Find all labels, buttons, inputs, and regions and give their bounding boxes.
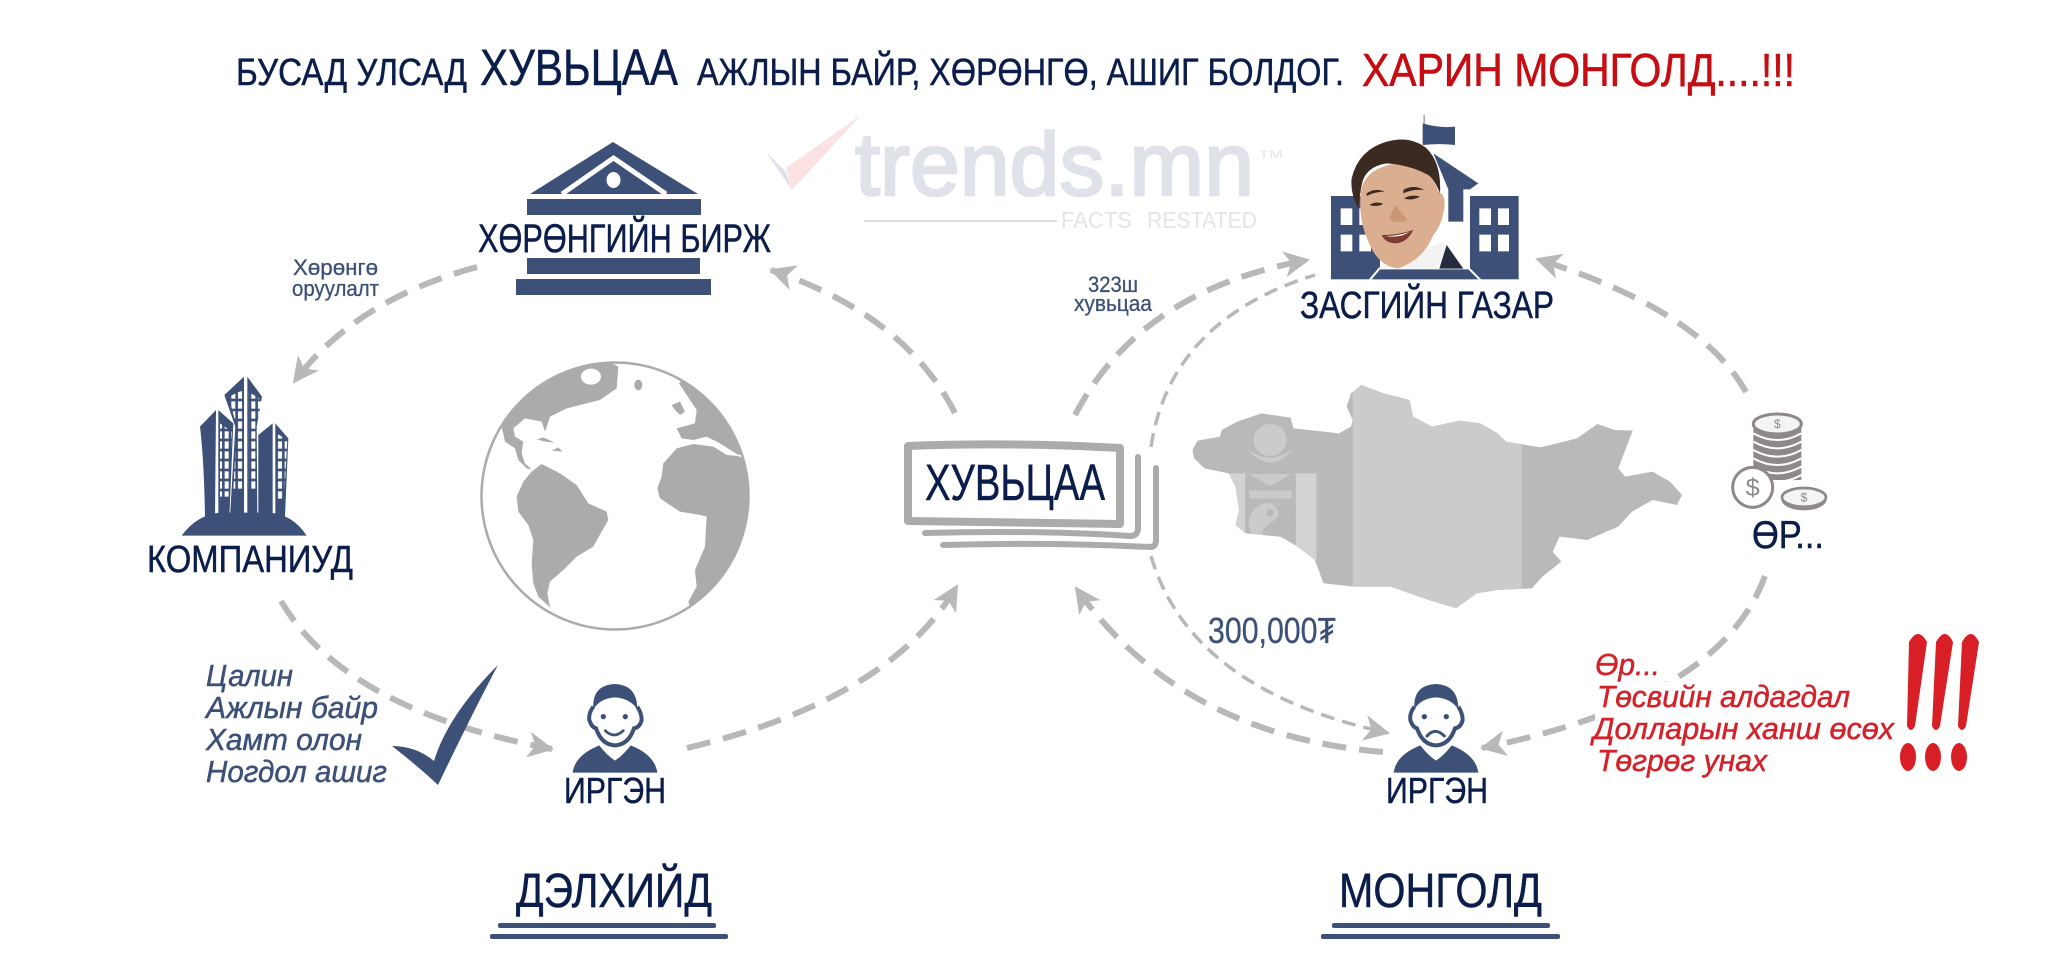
label: investment: оруулалт bbox=[292, 276, 379, 301]
label: 323 shares bbox=[1074, 272, 1153, 316]
text block: benefits list: Хамт олон bbox=[205, 722, 362, 757]
label: 323 shares: хувьцаа bbox=[1074, 291, 1153, 316]
title: ХАРИН МОНГОЛД....!!! bbox=[1362, 44, 1795, 96]
arrow: thin dashed top, shares to government bbox=[1151, 275, 1315, 447]
text block: consequences: Төгрөг унах bbox=[1597, 743, 1768, 778]
label: stock exchange: ХӨРӨНГИЙН БИРЖ bbox=[478, 215, 771, 261]
watermark: trends.mn: trends.mn bbox=[855, 114, 1254, 214]
heading: world: ДЭЛХИЙД bbox=[516, 863, 712, 918]
arrow: debt to government bbox=[1537, 259, 1746, 392]
label: 323 shares: 323ш bbox=[1088, 272, 1138, 297]
text block: consequences: Өр... bbox=[1595, 647, 1660, 682]
icon: coins: $ bbox=[1746, 474, 1760, 502]
icon: stock exchange building bbox=[516, 142, 711, 295]
label: citizen: ИРГЭН bbox=[564, 770, 666, 811]
label: investment: Хөрөнгө bbox=[293, 255, 378, 280]
title: БУСАД УЛСАД bbox=[236, 52, 467, 94]
heading: world bbox=[490, 863, 728, 939]
arrow: exchange to companies bbox=[294, 267, 477, 382]
icon: coins: $ bbox=[1801, 490, 1808, 504]
text block: consequences: Долларын ханш өсөх bbox=[1590, 711, 1895, 746]
label: citizen (Mongolia): ИРГЭН bbox=[1386, 770, 1488, 811]
label: government: ЗАСГИЙН ГАЗАР bbox=[1300, 282, 1554, 327]
heading: Mongolia: МОНГОЛД bbox=[1339, 865, 1542, 918]
title bbox=[236, 39, 1795, 96]
text block: consequences: Төсвийн алдагдал bbox=[1597, 679, 1850, 714]
portrait bbox=[1351, 139, 1445, 268]
icon: coins bbox=[1733, 414, 1827, 510]
icon: globe bbox=[482, 353, 760, 630]
label: companies: КОМПАНИУД bbox=[147, 539, 353, 581]
text block: benefits list bbox=[204, 658, 387, 789]
watermark: trends.mn: RESTATED bbox=[1147, 207, 1257, 233]
icon: sad citizen bbox=[1394, 684, 1478, 773]
arrow: shares to exchange bbox=[771, 270, 955, 413]
icon: check mark bbox=[392, 665, 498, 785]
text block: benefits list: Ногдол ашиг bbox=[206, 754, 387, 789]
icon: stack of share certificates bbox=[908, 444, 1156, 547]
title: ХУВЬЦАА bbox=[480, 39, 678, 96]
label: debt: ӨР... bbox=[1752, 514, 1824, 557]
title: АЖЛЫН БАЙР, ХӨРӨНГӨ, АШИГ БОЛДОГ. bbox=[697, 49, 1344, 94]
icon: exclamation marks bbox=[1900, 634, 1979, 771]
label: 300,000 tugrik: 300,000₮ bbox=[1208, 610, 1336, 651]
arrow: shares to government bbox=[1075, 260, 1308, 415]
watermark: trends.mn: TM bbox=[1259, 149, 1283, 161]
icon: happy citizen bbox=[573, 684, 657, 773]
text block: benefits list: Ажлын байр bbox=[204, 690, 378, 725]
label: shares: ХУВЬЦАА bbox=[925, 454, 1105, 511]
arrow: citizen to shares bbox=[687, 586, 957, 748]
text block: consequences bbox=[1590, 647, 1895, 778]
map: Mongolia bbox=[1192, 385, 1682, 608]
watermark: trends.mn: FACTS bbox=[1061, 207, 1132, 233]
icon: company towers bbox=[182, 377, 307, 536]
icon: government building with portrait bbox=[1331, 115, 1519, 279]
label: investment bbox=[292, 255, 379, 301]
arrow: debt to citizen bbox=[1482, 576, 1765, 748]
icon: coins: $ bbox=[1774, 417, 1781, 431]
arrow: companies to citizen bbox=[281, 601, 552, 749]
arrow: citizen to shares (Mongolia) bbox=[1076, 588, 1383, 752]
arrow: thin dashed bottom, shares to citizen bbox=[1151, 556, 1388, 733]
text block: benefits list: Цалин bbox=[206, 658, 293, 693]
heading: Mongolia bbox=[1321, 865, 1560, 939]
watermark: trends.mn bbox=[766, 114, 1283, 233]
